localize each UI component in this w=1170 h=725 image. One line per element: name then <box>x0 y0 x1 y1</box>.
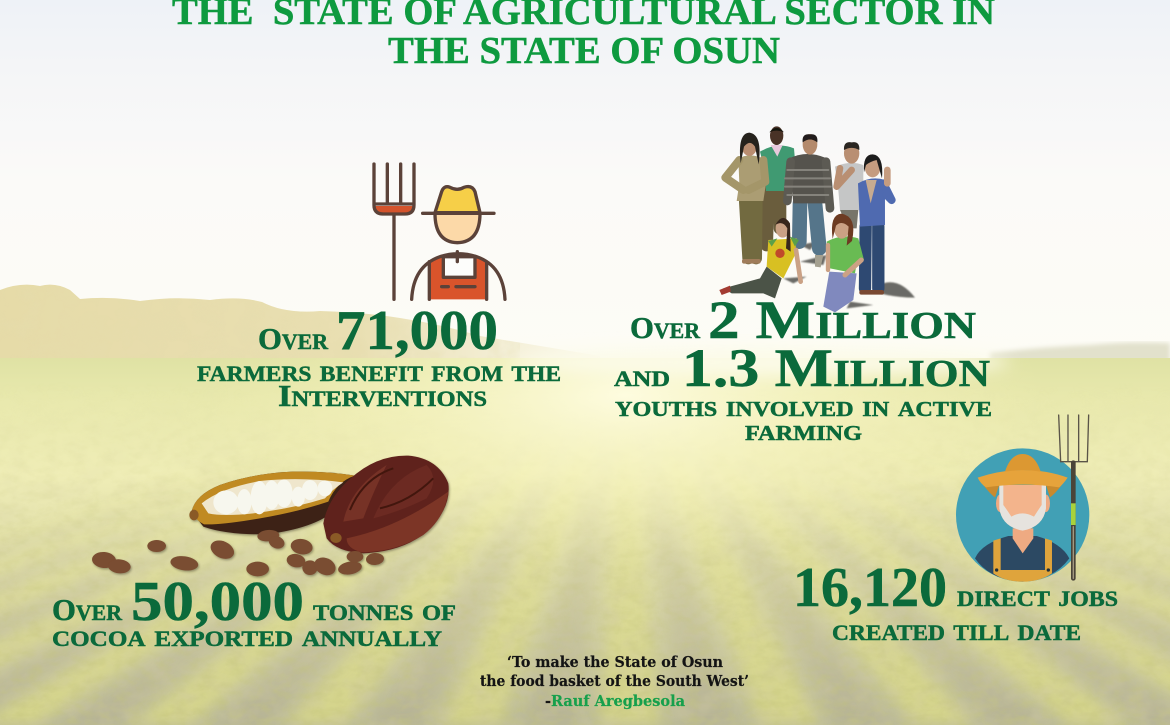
icon: old farmer in circle with fork <box>956 415 1089 582</box>
illustration: group of youths <box>719 126 915 312</box>
stat: 50,000 tonnes of cocoa: 50,000 <box>131 571 304 633</box>
background: tree line <box>0 280 1170 362</box>
stat: 71,000 farmers: Over <box>258 321 329 356</box>
ground shadows <box>783 242 915 308</box>
title <box>172 0 995 72</box>
cocoa beans <box>91 529 384 579</box>
stat: 16,120 direct jobs: created till date <box>832 612 1081 647</box>
person: grey t-shirt <box>835 142 863 228</box>
stat: 2 million and 1.3 million youths: Over <box>630 310 701 345</box>
icon: farmer with pitchfork <box>374 164 505 299</box>
quote: ‘To make the State of Osun <box>507 653 723 671</box>
background: crop field <box>0 340 1170 725</box>
closed cocoa pod <box>323 456 449 553</box>
stat: 50,000 tonnes of cocoa <box>52 571 456 653</box>
quote <box>480 653 749 710</box>
stat: 2 million and 1.3 million youths: and <box>614 358 670 393</box>
pitchfork <box>1059 415 1089 578</box>
stat: 50,000 tonnes of cocoa: Over <box>52 592 123 627</box>
stat: 50,000 tonnes of cocoa: tonnes of <box>313 592 456 627</box>
shoulders <box>975 536 1069 582</box>
head <box>996 495 1004 512</box>
open cocoa pod <box>189 472 355 534</box>
quote: the food basket of the South West’ <box>480 672 749 690</box>
stat: 16,120 direct jobs: 16,120 <box>793 557 947 619</box>
person: striped sweater <box>785 134 831 267</box>
stat: 71,000 farmers <box>197 300 561 413</box>
stat: 71,000 farmers: farmers benefit from the <box>197 353 561 388</box>
illustration: cocoa pods and beans <box>91 456 449 579</box>
hat <box>983 485 1062 497</box>
stat: 2 million and 1.3 million youths: 1.3 Million <box>682 338 990 398</box>
stat: 2 million and 1.3 million youths <box>614 290 992 447</box>
stat: 2 million and 1.3 million youths: youths involved in active <box>615 390 992 423</box>
stat: 50,000 tonnes of cocoa: cocoa exported annually <box>52 618 442 653</box>
stat: 71,000 farmers: Interventions <box>278 378 487 413</box>
person: yellow shirt reclining <box>719 218 801 298</box>
person: green shirt kneeling <box>823 214 864 312</box>
stat: 71,000 farmers: 71,000 <box>336 300 498 362</box>
title: THE STATE OF OSUN <box>388 30 780 72</box>
stat: 16,120 direct jobs: direct jobs <box>957 578 1118 613</box>
background: sky <box>0 0 1170 362</box>
stat: 2 million and 1.3 million youths: 2 Million <box>708 290 976 350</box>
stat: 16,120 direct jobs <box>793 557 1118 647</box>
person: blue blazer woman <box>858 154 892 295</box>
person: green sweater <box>760 126 796 245</box>
person: tan suit woman <box>725 133 766 264</box>
quote: -Rauf Aregbesola <box>545 692 685 710</box>
stat: 2 million and 1.3 million youths: farming <box>745 414 862 447</box>
